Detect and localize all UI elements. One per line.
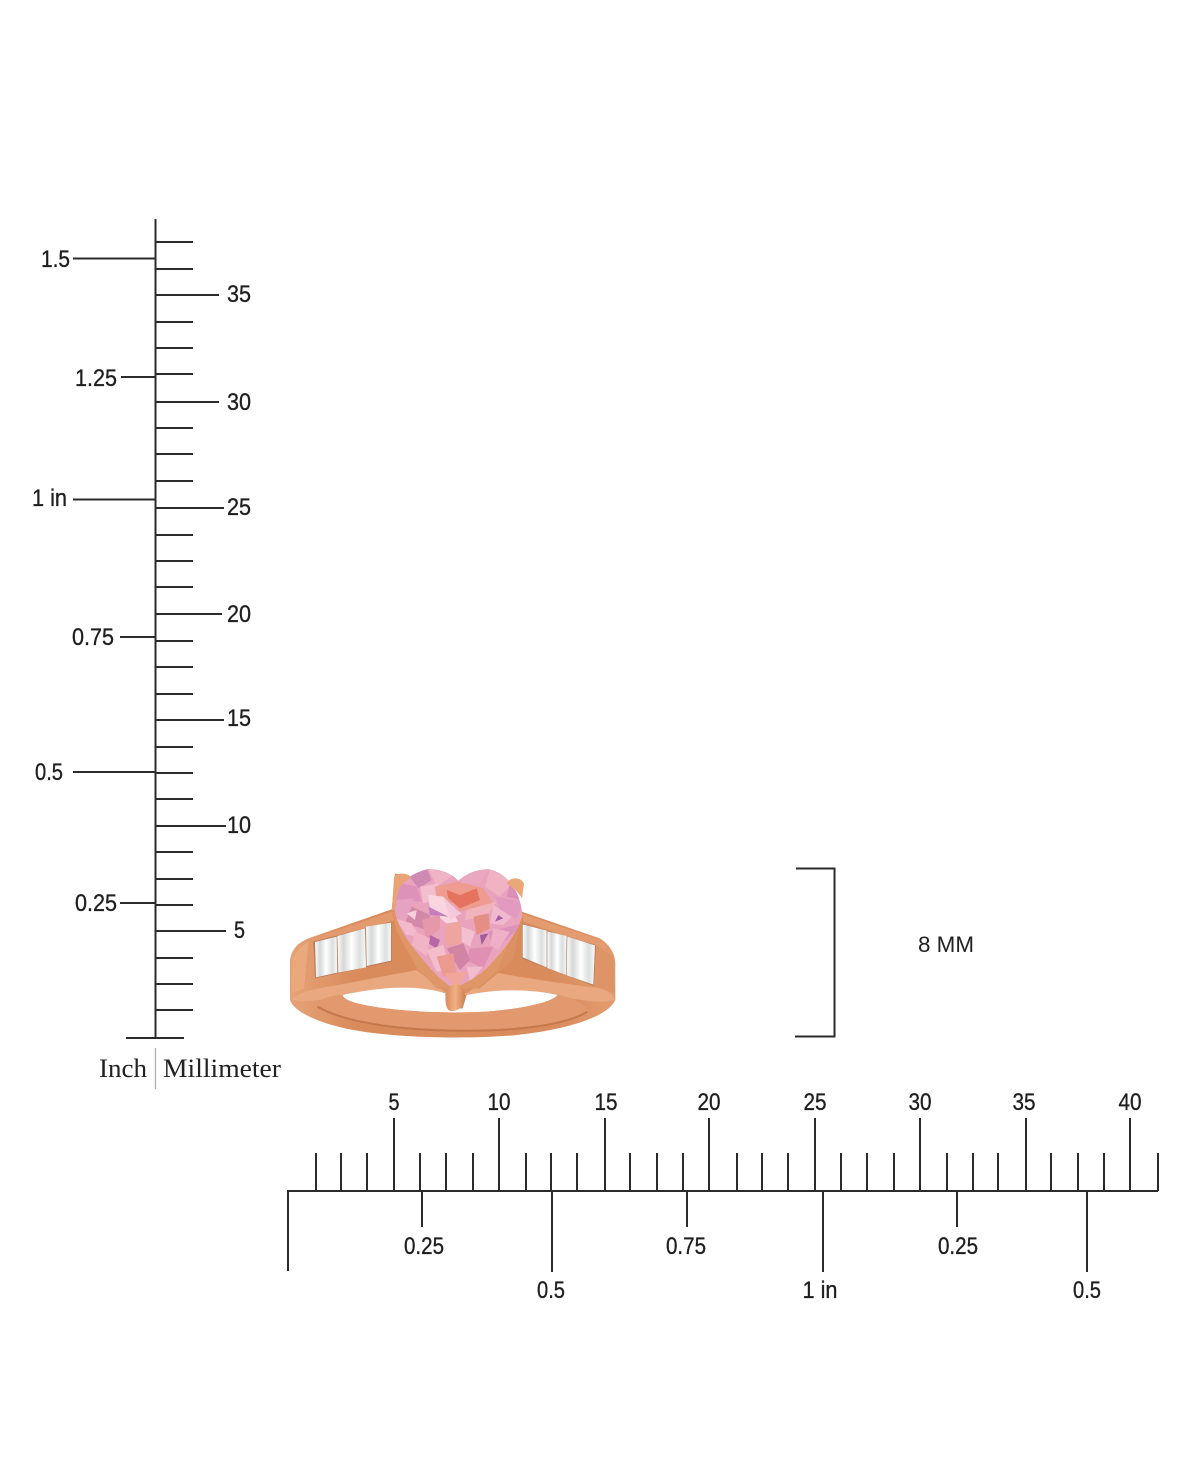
ring illustration [290,868,615,1038]
ring band [290,909,615,1038]
inch labels: 1 in [32,485,67,512]
inch labels: 0.5 [537,1277,565,1304]
gem facets [393,868,523,990]
unit caption: Inch [99,1054,147,1083]
inch labels: 0.25 [938,1233,978,1260]
inch labels: 1.25 [75,365,117,392]
inch labels: 1.5 [41,246,70,273]
vertical ruler [32,219,281,1089]
millimeter labels: 30 [227,389,251,416]
inch labels [404,1233,1101,1304]
millimeter labels [227,281,251,944]
upper left prong [392,874,411,910]
inch labels: 0.75 [72,624,114,651]
millimeter labels: 40 [1118,1089,1142,1116]
pink heart gem [392,868,524,1011]
millimeter labels [388,1089,1142,1116]
millimeter labels: 25 [227,494,251,521]
right baguette stones [522,923,596,986]
unit caption [99,1048,281,1089]
unit caption: Millimeter [163,1054,281,1083]
vertical ruler axis [126,219,184,1038]
millimeter labels: 5 [388,1089,400,1116]
inch labels: 0.5 [35,759,63,786]
millimeter labels: 10 [227,812,251,839]
millimeter labels: 5 [234,917,245,944]
inch labels: 0.75 [666,1233,706,1260]
height bracket [795,868,834,1036]
millimeter labels: 15 [227,705,251,732]
millimeter ticks [316,1118,1158,1191]
millimeter labels: 10 [488,1089,510,1116]
inch labels [32,246,117,917]
front prong [445,984,465,1011]
band inner opening [343,988,557,1013]
millimeter ticks [155,242,226,1010]
millimeter labels: 25 [804,1089,826,1116]
horizontal axis [288,1190,1158,1271]
millimeter labels: 35 [1012,1089,1036,1116]
height label: 8 MM [918,932,974,957]
horizontal ruler [288,1089,1158,1304]
millimeter labels: 35 [227,281,251,308]
inch labels: 0.25 [75,890,117,917]
inch labels: 0.25 [404,1233,444,1260]
inch labels: 1 in [802,1277,838,1304]
upper right prong [507,878,524,898]
left baguette stones [313,922,392,978]
inch ticks [422,1191,1087,1272]
millimeter labels: 15 [594,1089,618,1116]
millimeter labels: 20 [227,601,251,628]
millimeter labels: 20 [698,1089,720,1116]
gem mount [392,873,522,993]
millimeter labels: 30 [908,1089,932,1116]
inch ticks [73,258,155,903]
inch labels: 0.5 [1073,1277,1101,1304]
